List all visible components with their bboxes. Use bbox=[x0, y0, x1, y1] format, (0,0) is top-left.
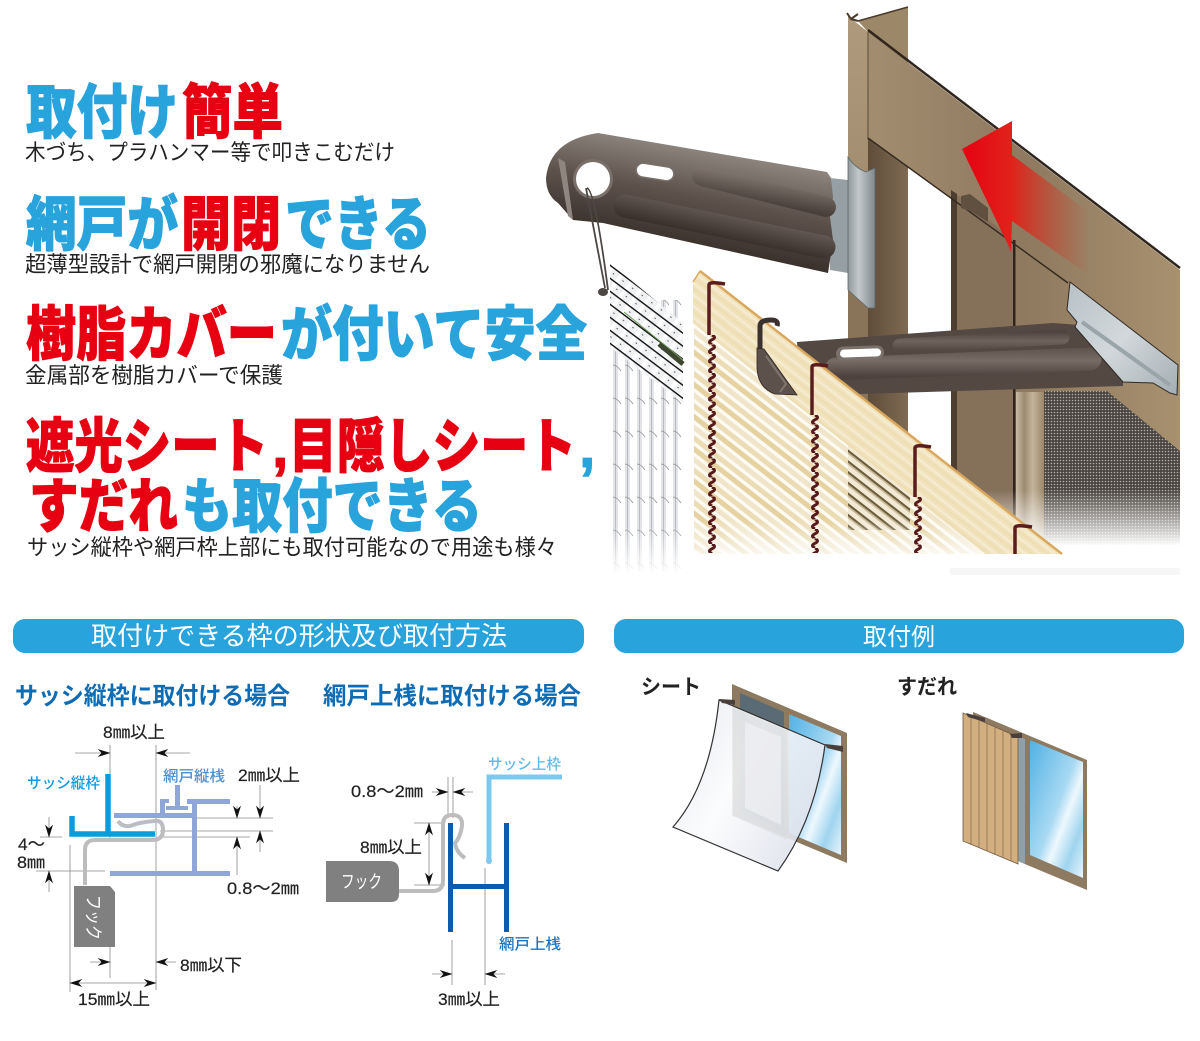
sheet bbox=[673, 700, 825, 871]
lower hook bbox=[757, 320, 797, 395]
net screen sheet bbox=[606, 263, 688, 575]
top sash frame bbox=[489, 777, 562, 860]
diagram: sash vertical frame: 15㎜以上 bbox=[78, 990, 150, 1009]
diagram: sash vertical frame bbox=[17, 723, 300, 1009]
subtext: easy installation: 木づち、プラハンマー等で叩きこむだけ bbox=[25, 140, 395, 165]
window bbox=[973, 712, 1087, 890]
hook block bbox=[74, 886, 115, 947]
header band: frame shapes: 取付けできる枠の形状及び取付方法 bbox=[91, 621, 507, 651]
heading: screen door can open: 網戸が bbox=[26, 192, 178, 258]
header band: examples bbox=[614, 619, 1184, 653]
heading: resin cover: 樹脂カバー bbox=[26, 302, 277, 368]
example: window with sheet bbox=[673, 684, 847, 871]
inner screen frame and mesh bbox=[868, 138, 1180, 562]
subtext: resin cover: 金属部を樹脂カバーで保護 bbox=[25, 363, 283, 388]
illustration: window frame with bracket and blinds bbox=[546, 7, 1185, 585]
subtext: sheets and blinds: サッシ縦枠や網戸枠上部にも取付可能なので用途も様々 bbox=[27, 535, 557, 560]
diagram: sash vertical frame: 4～ bbox=[18, 835, 45, 854]
hook block bbox=[326, 861, 399, 902]
heading: screen door can open bbox=[26, 192, 431, 258]
blind brackets bbox=[966, 713, 1022, 738]
label: blind: すだれ bbox=[897, 676, 957, 699]
diagram: sash vertical frame: 2㎜以上 bbox=[238, 766, 300, 785]
hook block: フック bbox=[341, 872, 382, 892]
bottom fade of frame bbox=[945, 490, 1185, 546]
heading: sheets and blinds bbox=[26, 414, 595, 540]
upper bracket bbox=[546, 133, 875, 308]
diagram: sash vertical frame: サッシ縦枠 bbox=[27, 775, 100, 792]
blinds bbox=[693, 271, 1062, 554]
diagram: sash vertical frame: 8㎜以下 bbox=[180, 956, 242, 975]
heading: easy installation: 取付け bbox=[26, 80, 178, 146]
heading: sheets and blinds: 遮光シート bbox=[26, 414, 268, 480]
blind cords bbox=[706, 283, 1032, 554]
example: window with blind bbox=[963, 712, 1087, 890]
header band: frame shapes bbox=[13, 619, 584, 653]
heading: easy installation bbox=[26, 80, 283, 146]
subheading: sash vertical frame: サッシ縦枠に取付ける場合 bbox=[15, 683, 290, 710]
lower bracket plate bbox=[797, 282, 1178, 395]
heading: easy installation: 簡単 bbox=[182, 80, 283, 146]
hook wire bbox=[399, 815, 465, 891]
diagram: sash vertical frame: 0.8～2㎜ bbox=[227, 879, 299, 898]
heading: sheets and blinds: 目隠しシート bbox=[289, 414, 576, 480]
sheet brackets bbox=[719, 699, 843, 752]
diagram: screen door top rail: 3㎜以上 bbox=[438, 990, 500, 1009]
hook wire bbox=[85, 821, 163, 885]
window post and top beam bbox=[847, 7, 1180, 560]
dimension labels: 8㎜以上 bbox=[103, 723, 165, 742]
blind curtain bbox=[963, 713, 1018, 864]
screen door stile profile bbox=[110, 785, 230, 876]
heading: sheets and blinds: , bbox=[579, 414, 595, 480]
heading: sheets and blinds: すだれ bbox=[29, 474, 178, 540]
H-shaped rail bbox=[450, 823, 506, 932]
diagram: screen door top rail bbox=[326, 756, 562, 1009]
window bbox=[732, 684, 847, 863]
dimension lines bbox=[36, 745, 273, 992]
diagram: screen door top rail: 網戸上桟 bbox=[499, 936, 561, 953]
sash frame profile bbox=[72, 774, 155, 834]
label: sheet: シート bbox=[641, 676, 701, 699]
heading: screen door can open: 開閉 bbox=[181, 192, 281, 258]
dimension lines bbox=[414, 777, 505, 985]
diagram: sash vertical frame: 8㎜ bbox=[17, 853, 45, 872]
heading: resin cover: が付いて安全 bbox=[281, 302, 587, 368]
heading: sheets and blinds: , bbox=[272, 414, 288, 480]
subtext: screen door: 超薄型設計で網戸開閉の邪魔になりません bbox=[25, 252, 430, 277]
heading: screen door can open: できる bbox=[285, 192, 431, 258]
red arrow bbox=[962, 121, 1090, 276]
diagram: screen door top rail: 8㎜以上 bbox=[360, 838, 422, 857]
dimension labels: 0.8～2㎜ bbox=[351, 782, 423, 801]
subheading: screen door top rail: 網戸上桟に取付ける場合 bbox=[323, 683, 581, 710]
heading: resin cover bbox=[26, 302, 587, 368]
diagram: screen door top rail: サッシ上枠 bbox=[488, 756, 561, 773]
hook block: フック bbox=[83, 895, 103, 940]
header band: examples: 取付例 bbox=[863, 624, 935, 651]
heading: sheets and blinds: も取付できる bbox=[182, 474, 482, 540]
diagram: sash vertical frame: 網戸縦桟 bbox=[163, 768, 225, 785]
